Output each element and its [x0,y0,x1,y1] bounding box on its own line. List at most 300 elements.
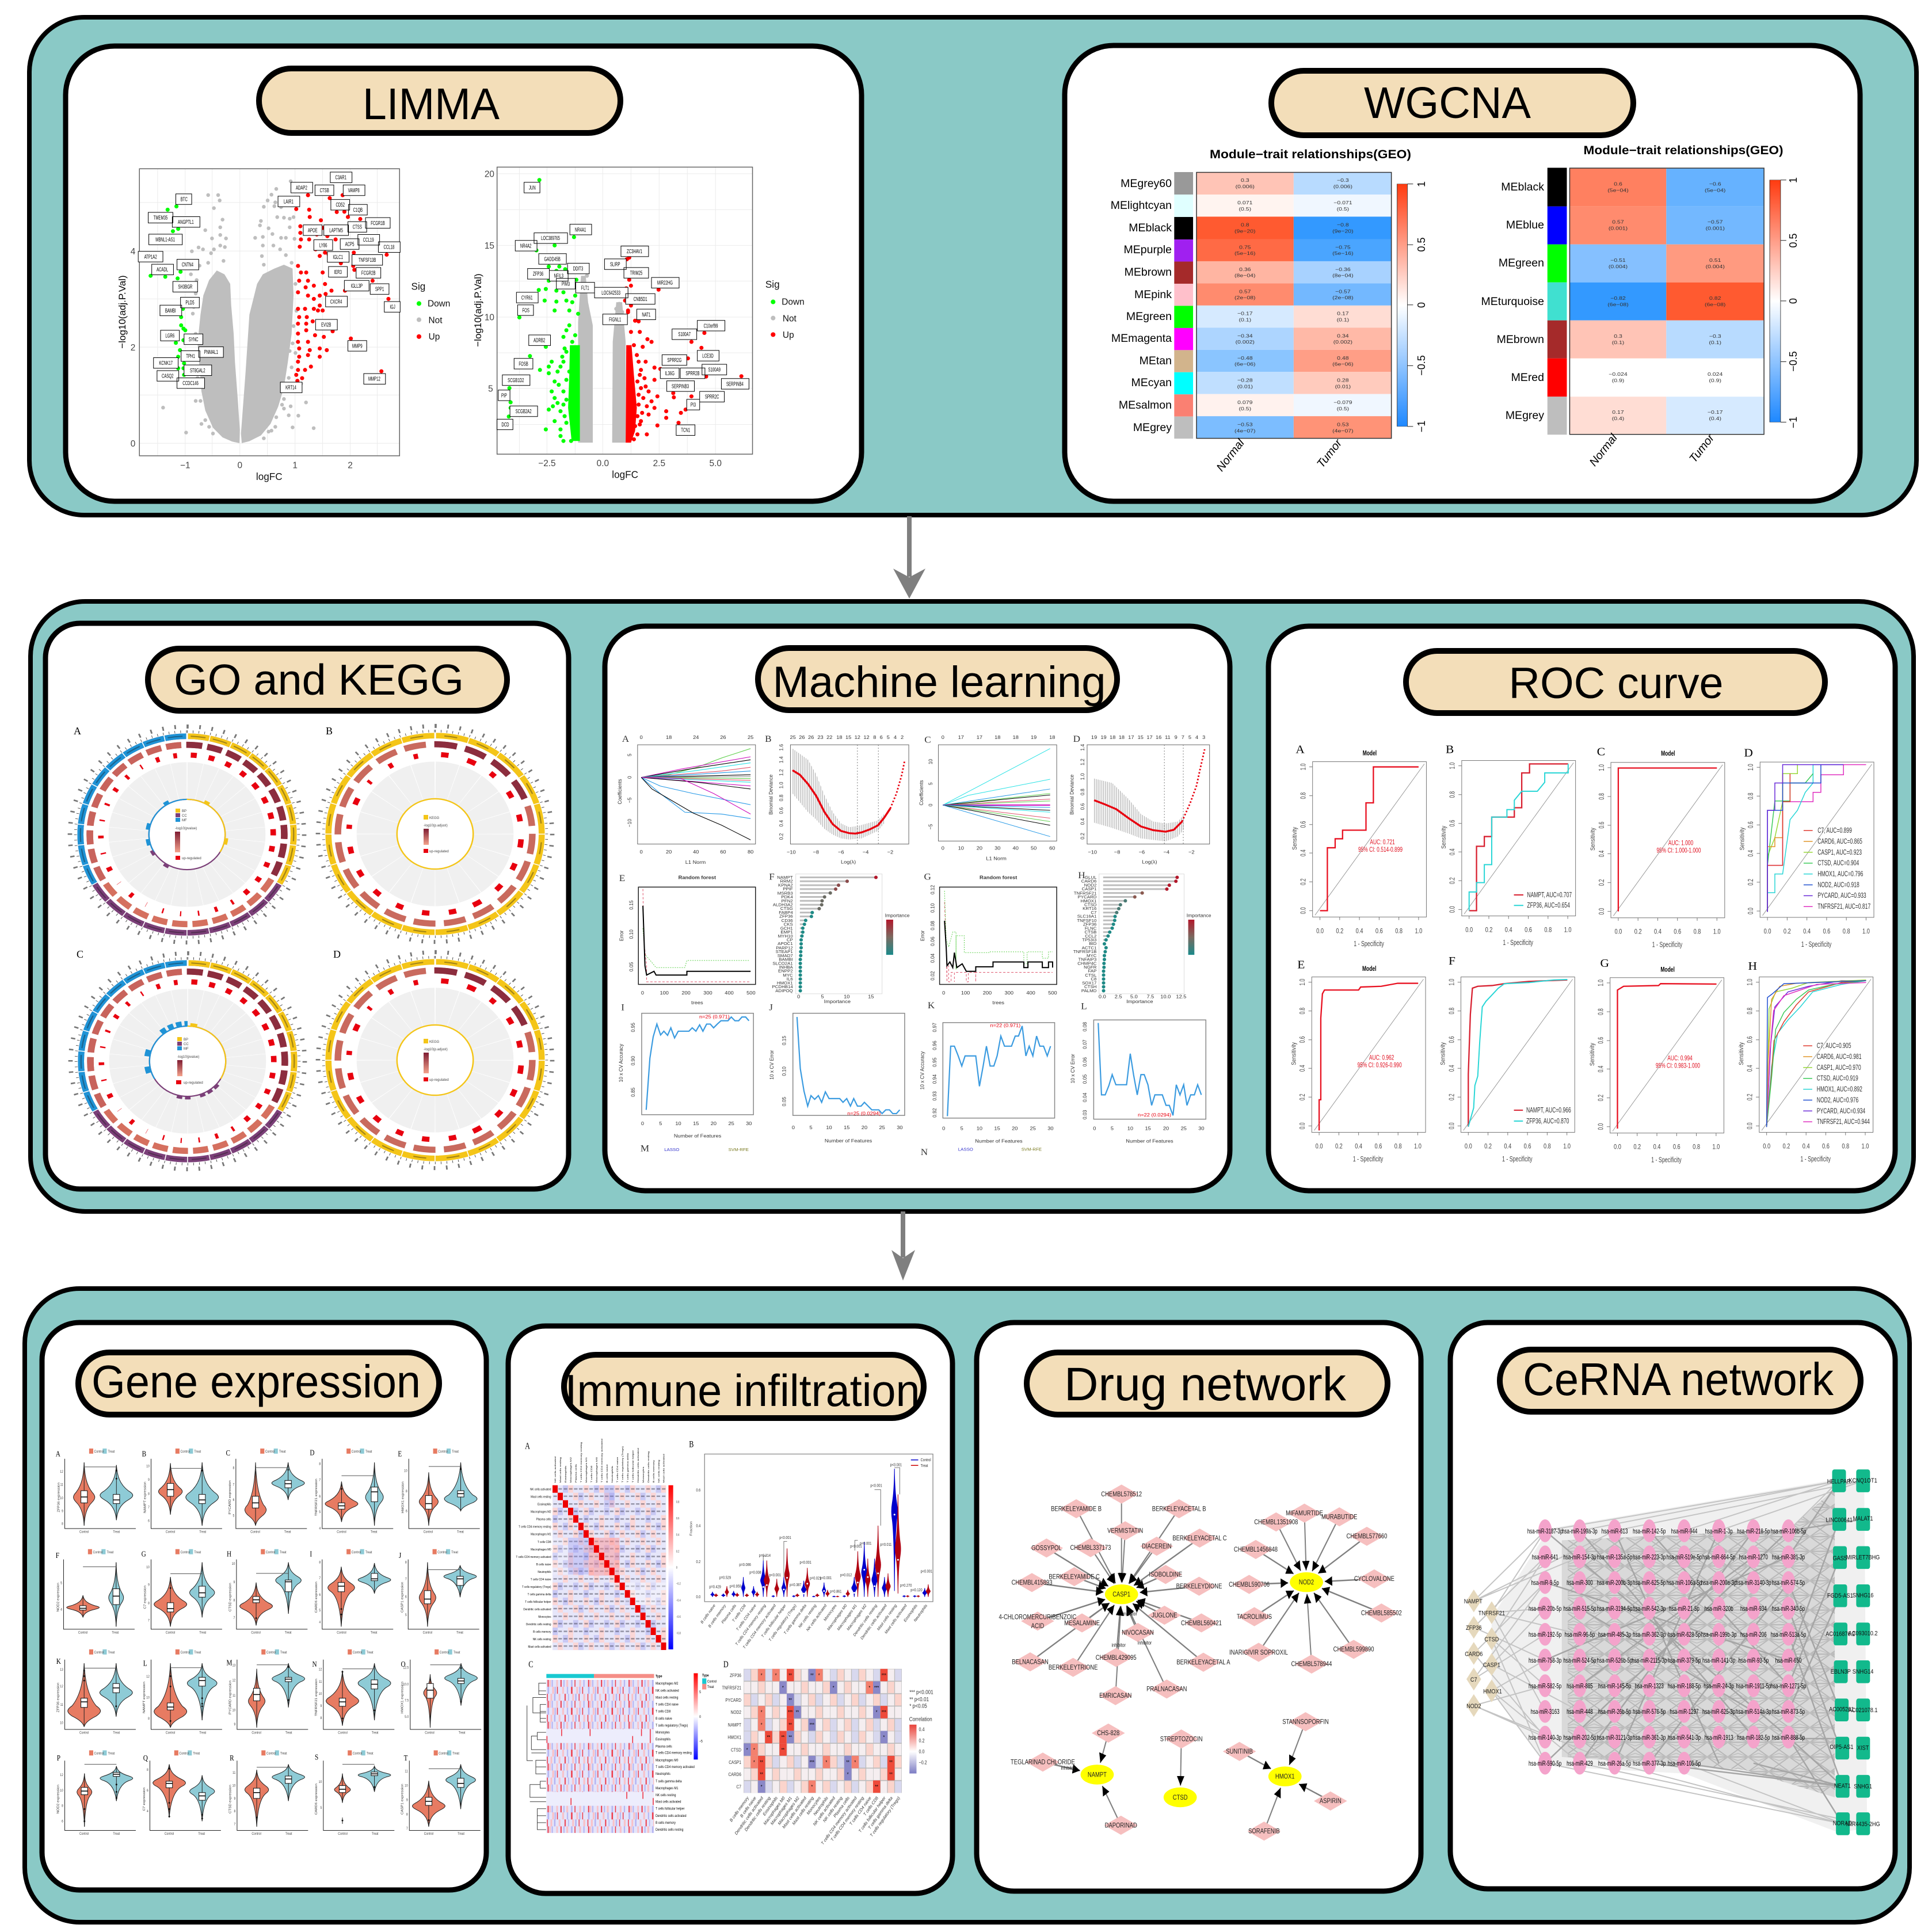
chart: circos A: -log10(pvalue) [175,827,197,830]
miRNA labels: hsa-miR-9-5p [1531,1580,1559,1587]
volcano gene labels: CNB5D1 [634,296,647,302]
panel letters: Q [143,1754,148,1763]
chart H: importance lollipop: CHMP4C [1077,961,1097,966]
miRNA labels: hsa-miR-1270 [1739,1554,1768,1561]
chart I: SVM-RFE accuracy: 10 x CV Accuracy [618,1043,624,1082]
heatmap A: immune correlation: −0.2 [676,1582,681,1586]
chart K: SVM-RFE accuracy: 0.93 [932,1091,938,1101]
volcano gene labels: NAT1 [642,311,651,318]
ROC H legend: HMOX1, AUC=0.892 [1817,1085,1862,1093]
volcano gene labels: CCDC146 [182,380,199,387]
axis and legend: 0 [237,460,242,470]
chart F: importance lollipop: PFN2 [782,898,793,904]
chart K: SVM-RFE accuracy: 20 [1012,1126,1018,1131]
chart H: importance lollipop: KRT16 [1083,906,1096,911]
heatmap D: gene-immune correlation: T cells CD8 [863,1795,879,1817]
heatmap D: gene-immune correlation: *** [882,1709,887,1715]
miRNA labels: hsa-miR-542-3p [1633,1605,1666,1613]
miRNA labels: hsa-miR-1-3p [1705,1528,1733,1535]
cell values: −0.34 [1237,333,1253,339]
y-axis tick labels: 12 [60,1774,63,1777]
node labels: BERKELEYTRIONE [1049,1664,1098,1671]
y-axis titles: CARD6 expression [315,1582,318,1613]
cell values: −0.17 [1237,311,1253,317]
Venn captions M and N: N [921,1147,928,1157]
heatmap C: immune fractions: T cells follicular helper [656,1807,684,1811]
row labels: MElightcyan [1111,199,1172,212]
panel letters: P [57,1754,60,1763]
y-axis tick labels: 8 [405,1561,407,1565]
chart: circos D: up-regulated [429,1079,449,1082]
lncRNA labels: NEAT1 [1834,1783,1851,1790]
heatmap C: immune fractions: Dendritic cells resting [656,1828,683,1832]
chart D: LASSO deviance: 1.2 [1080,759,1085,765]
miRNA labels: hsa-miR-1911-5p [1736,1683,1771,1690]
y-axis tick labels: 10 [404,1469,407,1473]
chart J: SVM-RFE error: 5 [810,1125,813,1130]
chart B: LASSO deviance: B [765,734,772,744]
grey non-significant points [163,181,314,443]
heatmap A: immune correlation: 0.2 [676,1550,680,1553]
chart H: importance lollipop: 2.5 [1115,994,1122,999]
chart C: LASSO coefficients [919,734,1057,861]
y-axis titles [57,1478,405,1815]
chart F: importance lollipop: MYH10 [778,934,793,939]
cell values: (0.004) [1609,264,1628,270]
chart D: LASSO deviance: 18 [1110,734,1115,740]
chart I: SVM-RFE accuracy: 0.85 [630,1088,636,1097]
chart H: importance lollipop: SOX17 [1082,981,1096,985]
chart B: immune cell fractions: Macrophages M1 [837,1603,858,1632]
cell values: (5e−16) [1332,251,1354,257]
y-axis tick labels [60,1462,409,1831]
ROC F: ZFP36, AUC=0.870 [1526,1117,1569,1125]
chart J: SVM-RFE error [769,1002,905,1144]
panel letters: H [227,1549,231,1558]
cell values: (0.01) [1335,384,1351,390]
chart B: LASSO deviance: 1.2 [778,769,784,776]
chart G: random forest error: 300 [1005,990,1013,996]
chart F: importance lollipop: CTSG [780,906,793,911]
chart B: immune cell fractions: T cells CD8 [732,1603,747,1624]
colour bar labels and columns: −1 [1416,421,1427,432]
cell values: (0.4) [1709,416,1721,422]
node labels: BERKELEYAMIDE C [1049,1573,1100,1581]
cell values: 0.3 [1614,334,1622,340]
ROC E: 95% CI: 0.926-0.990 [1358,1061,1402,1069]
heatmap D: gene-immune correlation: * [833,1685,834,1691]
miRNA labels: hsa-miR-888-5p [1772,1734,1805,1742]
y-axis tick labels: 8 [406,1813,408,1816]
chart I: SVM-RFE accuracy: Number of Features [674,1133,722,1138]
miRNA labels: hsa-miR-541-3p [1668,1734,1701,1742]
ROC E: Model [1362,965,1376,973]
miRNA labels: hsa-miR-758-3p [1529,1657,1561,1664]
node labels: MURABUTIDE [1321,1513,1357,1521]
axis and legend: 1 [292,460,298,470]
heatmap C: immune fractions: Macrophages M0 [656,1759,678,1763]
chart B: immune cell fractions: Dendritic cells activated [860,1603,887,1641]
y-axis tick labels: 8 [233,1466,234,1470]
axis and legend: −2.5 [538,459,556,468]
cell values: (9e−20) [1332,228,1354,234]
chart I: SVM-RFE accuracy: 0.95 [630,1023,636,1032]
panel: WGCNA [1065,45,1860,501]
heatmap A: immune correlation: 0.8 [676,1500,680,1503]
y-axis tick labels: 6 [319,1495,321,1499]
chart B: LASSO deviance: −2 [887,849,893,855]
cell values: 0.079 [1237,400,1252,406]
chart F: importance lollipop: ADIPOQ [775,988,793,993]
chart E: random forest error: Error [618,931,624,941]
chart K: SVM-RFE accuracy: n=22 (0.971) [990,1023,1020,1028]
heatmap D: gene-immune correlation: NOD2 [731,1709,741,1715]
chart H: importance lollipop: TNFRSF1B [1073,949,1096,954]
heatmap C: immune fractions: −5 [699,1740,703,1744]
ROC D legend: CTSD, AUC=0.904 [1817,859,1859,867]
panel letters: N [312,1660,317,1668]
panel: ROC curve [1268,626,1895,1191]
Venn captions M and N: LASSO [664,1147,680,1152]
ROC D [1739,747,1874,948]
row labels: MEgrey60 [1121,177,1172,190]
lncRNA labels: MIR4435-2HG [1846,1821,1880,1828]
chart K: SVM-RFE accuracy: 30 [1047,1126,1054,1131]
ROC H legend: TNFRSF21, AUC=0.944 [1817,1118,1870,1126]
lncRNA labels: EBLN3P [1831,1668,1851,1675]
heatmap A: immune correlation: A [525,1441,530,1451]
panel letters: C [226,1449,230,1457]
chart C: LASSO coefficients: 50 [1031,845,1037,851]
axis and legend: 0 [131,439,135,449]
chart D: LASSO deviance: 19 [1100,734,1107,740]
y-axis tick labels: 6 [148,1519,150,1523]
heatmap: module-trait GEO right [1481,144,1799,468]
volcano gene labels: FIGNL1 [609,317,622,323]
y-axis titles: CTSD expression [229,1785,232,1813]
chart L: SVM-RFE error: 0 [1093,1126,1096,1131]
colour bar labels and columns: Tumor [1687,431,1717,465]
heatmap D: gene-immune correlation: T cells regulatory (Tregs) [869,1795,901,1838]
cell values: (0.006) [1236,184,1255,190]
chart I: SVM-RFE accuracy: 5 [659,1121,662,1126]
y-axis tick labels: 7 [319,1478,321,1483]
heatmap: module-trait GEO left [1111,148,1427,474]
cell values: −0.57 [1708,219,1723,225]
lncRNA squares [1832,1469,1870,1835]
volcano gene labels: ZC3HAV1 [627,249,642,255]
node labels: CHEMBL415893 [1012,1579,1052,1587]
chart B: LASSO deviance: 12 [855,734,860,740]
chart A: LASSO coefficients: L1 Norm [685,859,706,865]
chart: circos C: BP [184,1038,188,1042]
chart D: LASSO deviance: 4 [1195,734,1198,740]
miRNA labels: hsa-miR-873-5p [1772,1709,1805,1716]
miRNA labels: hsa-miR-574-5p [1772,1580,1805,1587]
panel letters: G [142,1549,146,1558]
heatmap D: gene-immune correlation: * [811,1784,813,1790]
chart: circos C [70,948,305,1169]
row labels: MEbrown [1497,333,1544,346]
lncRNA labels: MIRLET7BHG [1846,1554,1880,1561]
axis and legend: logFC [612,468,638,480]
heatmap A: immune correlation: 0 [676,1566,677,1569]
volcano gene labels: C3AR1 [335,174,346,181]
interaction edges [1474,1480,1867,1832]
heading: Gene expression: Gene expression [92,1356,421,1407]
heatmap C: immune fractions: NK cells activated [656,1689,679,1693]
volcano gene labels: ADAP2 [296,185,307,191]
chart B: immune cell fractions: Dendritic cells resting [853,1603,878,1637]
miRNA labels: hsa-miR-526b-5p [1597,1657,1633,1664]
ROC F: NAMPT, AUC=0.966 [1526,1106,1571,1115]
ROC D legend: C7, AUC=0.899 [1817,826,1852,835]
miRNA labels: hsa-miR-24-3p [1704,1683,1734,1690]
y-axis tick labels: 10 [146,1565,150,1569]
miRNA labels: hsa-miR-154-3p [1563,1554,1596,1561]
chart B: LASSO deviance: −6 [838,849,844,855]
row labels: MEmagenta [1111,332,1172,345]
chart B: immune cell fractions: Control [921,1458,931,1462]
chart C: LASSO coefficients: C [924,734,931,745]
chart G: random forest error: 0 [942,990,945,996]
miRNA labels: hsa-miR-664-5p [1702,1554,1735,1561]
cell values: 0.28 [1337,378,1349,383]
panel: Immune infiltration [508,1326,952,1893]
node labels: TACROLIMUS [1237,1613,1272,1621]
panel letters: I [310,1549,312,1558]
chart H: importance lollipop: CCL2 [1085,934,1096,939]
arrow: middle to bottom [891,1211,915,1281]
heatmap C: immune fractions: T cells CD4 memory resting [656,1751,692,1755]
heatmap C: immune fractions: 0 [699,1716,701,1719]
chart C: LASSO coefficients: 17 [977,734,982,740]
chart H: importance lollipop: C7 [1091,910,1096,915]
ROC G: AUC: 0.994 [1667,1054,1693,1062]
cell values: 0.8 [1241,223,1249,228]
node labels: SUNITINIB [1226,1748,1253,1755]
y-axis tick labels: 6 [406,1510,407,1514]
volcano gene labels: FOS [522,307,529,314]
chart D: LASSO deviance: −8 [1114,849,1120,855]
chart G: random forest error: Random forest [980,875,1017,881]
cell values: (6e−06) [1234,361,1256,367]
y-axis tick labels: 5.0 [405,1716,409,1719]
chart J: SVM-RFE error: 15 [844,1125,849,1130]
chart A: LASSO coefficients: 60 [720,849,726,855]
lncRNA labels: HELLPAR [1827,1478,1851,1485]
heatmap D: gene-immune correlation: * [868,1685,871,1691]
chart F: importance lollipop: GCH1 [780,926,793,931]
miRNA labels: hsa-miR-3194-5p [1597,1605,1633,1613]
chart I: SVM-RFE accuracy: n=25 (0.971) [699,1014,730,1020]
chart B: immune cell fractions: p<0.001 [769,1573,781,1577]
chart: circos C: up-regulated [184,1081,203,1085]
lncRNA labels: MALAT1 [1853,1515,1873,1522]
chart J: SVM-RFE error: 10 [826,1125,832,1130]
y-axis tick labels: 13 [60,1668,63,1672]
heatmap D: gene-immune correlation: T cells CD4 memory activated [820,1795,858,1846]
node labels: EMRICASAN [1099,1692,1131,1699]
volcano gene labels: SPRR2B [685,371,700,376]
heatmap D: gene-immune correlation [722,1660,933,1846]
chart H: importance lollipop: TP53I3 [1082,938,1096,943]
heatmap D: gene-immune correlation: Macrophages M2 [777,1795,800,1826]
row labels: MEred [1511,371,1544,384]
volcano gene labels: LAIR1 [284,199,294,205]
volcano gene labels: C1QB [353,207,363,213]
y-axis tick labels: 10.0 [403,1683,409,1687]
miRNA labels: hsa-miR-192-5p [1529,1632,1561,1639]
y-axis tick labels: 8 [320,1717,322,1720]
ROC B: NAMPT, AUC=0.707 [1527,891,1572,899]
ROC H legend [1803,1042,1870,1126]
cell values: −0.82 [1610,296,1626,302]
cell values: (5e−04) [1607,188,1629,193]
panel: GO and KEGG [45,623,569,1189]
chart F: importance lollipop: PPIF [783,887,793,891]
chart: circos D: D [333,948,341,960]
y-axis tick labels: 12.5 [403,1666,409,1670]
chart L: SVM-RFE error: 0.08 [1082,1022,1088,1031]
chart F: importance lollipop: 15 [868,994,874,999]
miRNA labels: hsa-miR-26a-5p [1598,1760,1631,1768]
node labels: CHEMBL577660 [1347,1533,1387,1541]
heatmap A: immune correlation: −0.6 [676,1615,681,1618]
lncRNA labels: AC016876.2 [1826,1630,1855,1638]
ROC D legend [1804,826,1870,911]
chart B: immune cell fractions: 0.2 [696,1560,701,1564]
node labels: ISOBOLDINE [1149,1571,1182,1579]
lncRNA labels: SNHG16 [1853,1592,1874,1599]
chart A: LASSO coefficients: A [622,734,629,744]
Venn captions M and N: SVM-RFE [729,1147,749,1152]
panel: Gene expression [42,1323,486,1890]
y-axis tick labels: 9 [234,1797,235,1801]
violin axes and legends [63,1449,481,1836]
ROC A: 95% CI: 0.514-0.899 [1358,846,1403,854]
chart L: SVM-RFE error: 30 [1198,1126,1205,1131]
volcano gene labels: MMP12 [368,376,380,382]
y-axis tick labels: 12 [146,1675,150,1679]
chart B: immune cell fractions: Macrophages M0 [827,1603,848,1632]
volcano gene labels: LGR6 [165,333,175,339]
heatmap C: immune fractions: Plasma cells [656,1745,672,1748]
chart D: LASSO deviance: 0.4 [1080,818,1085,825]
chart H: importance lollipop: TNFSF10 [1077,918,1096,923]
chart C: LASSO coefficients: 18 [1013,734,1019,740]
heatmap D: gene-immune correlation: * [876,1709,878,1715]
heatmap D: gene-immune correlation: Macrophages M1 [769,1795,793,1826]
y-axis tick labels: 9 [148,1478,150,1482]
row labels: MEbrown [1125,266,1172,279]
volcano gene labels: KCNK17 [159,360,173,367]
section: validation and networks [25,1289,1910,1922]
heatmap D: gene-immune correlation: * [761,1784,763,1790]
y-axis tick labels: 9 [406,1798,408,1803]
volcano gene labels: GADD45B [544,256,561,262]
cell values: (0.5) [1337,406,1349,412]
cell values: −0.071 [1333,200,1352,206]
lncRNA labels: SNHG14 [1853,1668,1874,1675]
miRNA nodes [1538,1519,1795,1774]
volcano gene labels: PIP [501,393,507,399]
chart: circos C: CC [184,1043,189,1046]
y-axis titles: CTSD expression [229,1583,232,1611]
heatmap D: gene-immune correlation: Monocytes [806,1795,822,1816]
volcano gene labels: VAMP8 [348,188,360,193]
y-axis tick labels: 4 [60,1608,63,1611]
chart J: SVM-RFE error: Number of Features [825,1138,872,1144]
volcano gene labels: NR4A1 [575,227,586,233]
y-axis titles: NOD2 expression [57,1785,60,1813]
chart F: importance lollipop: PARP12 [776,946,793,950]
heatmap D: gene-immune correlation: * [746,1747,748,1752]
miRNA labels: hsa-miR-141-3p [1702,1657,1735,1664]
y-axis titles: PYCARD expression [229,1681,232,1714]
lncRNA labels: OIP5-AS1 [1830,1744,1854,1751]
chart H: importance lollipop: ZFP36 [1083,922,1096,927]
heatmap D: gene-immune correlation: * [826,1759,828,1765]
heatmap D: gene-immune correlation: * [761,1672,763,1678]
chart B: LASSO deviance: 26 [808,734,814,740]
chart D: LASSO deviance: 17 [1128,734,1134,740]
y-axis tick labels: 10 [60,1497,63,1500]
chart F: importance lollipop [769,871,910,1004]
cell values: (0.01) [1237,384,1253,390]
volcano gene labels: MMP9 [352,343,363,349]
node labels: CTSD [1173,1794,1188,1801]
chart A: LASSO coefficients: 25 [748,734,753,740]
chart C: LASSO coefficients: 40 [1013,845,1019,851]
ROC G: G [1600,958,1609,970]
chart L: SVM-RFE error: n=22 (0.0294) [1138,1112,1171,1118]
chart B: LASSO deviance: Binomial Deviance [768,775,774,815]
chart: circos C: -log10(pvalue) [177,1055,199,1059]
chart B: immune cell fractions: 0.4 [696,1524,701,1529]
ROC F: F [1449,955,1455,967]
chart K: SVM-RFE accuracy: 0.95 [932,1058,938,1067]
heatmap D: gene-immune correlation: * [761,1722,763,1728]
volcano gene labels: LCE3D [702,353,714,359]
chart E: random forest error: 0.05 [628,962,634,971]
chart A: LASSO coefficients: −5 [627,798,632,803]
heatmap D: gene-immune correlation: Dendritic cells activated [734,1795,764,1836]
chart B: immune cell fractions [689,1439,933,1650]
chart B: immune cell fractions: NK cells activated [806,1603,828,1633]
heatmap D: gene-immune correlation: Neutrophils [813,1795,829,1817]
ROC H legend: CARD6, AUC=0.981 [1817,1053,1862,1061]
volcano gene labels: APOE [308,227,318,234]
chart L: SVM-RFE error: 25 [1181,1126,1187,1131]
heatmap D: gene-immune correlation: ** [788,1697,792,1703]
node labels: DAPORINAD [1105,1822,1137,1830]
panel: LIMMA [66,46,862,501]
axis and legend: 2 [348,460,353,470]
y-axis tick labels: 4 [147,1810,149,1813]
y-axis tick labels: 10 [60,1789,63,1793]
chart H: importance lollipop: TNFRSF21 [1074,891,1096,895]
y-axis tick labels: 5 [320,1806,322,1810]
panel: Drug network [977,1323,1421,1891]
chart J: SVM-RFE error: 20 [862,1125,867,1130]
chart H: importance lollipop: NOD2 [1084,883,1096,888]
node labels: CHEMBL1351908 [1254,1518,1298,1526]
miRNA labels: hsa-miR-379-5p [1668,1657,1701,1664]
cell values: (2e−08) [1234,295,1256,301]
chart H: importance lollipop [1073,870,1211,1004]
row labels: MEgrey [1506,409,1544,422]
